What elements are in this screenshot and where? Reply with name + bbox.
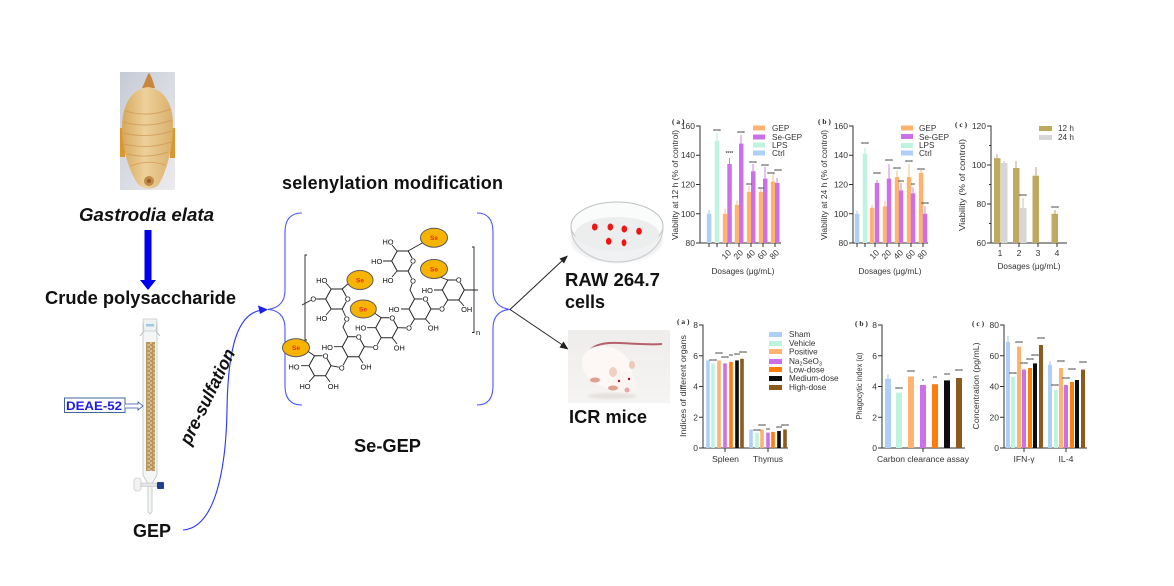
- bar chart: viability at 24 h: 140: [834, 150, 848, 160]
- significance marks: ****: [1015, 341, 1023, 347]
- bars: [707, 141, 780, 243]
- bar chart: viability by dosage: ( c ): [955, 120, 968, 129]
- legend: Medium-dose: [789, 374, 839, 383]
- left curly brace: [268, 213, 302, 405]
- legend: Se-GEP: [919, 133, 950, 142]
- bar chart: indices of organs: [677, 317, 839, 464]
- significance marks: **: [933, 376, 937, 382]
- significance marks: ****: [885, 159, 893, 165]
- bar chart: indices of organs: Indices of different organs: [679, 335, 688, 437]
- legend: [753, 124, 803, 158]
- substituent labels: [288, 238, 480, 391]
- bar chart: viability by dosage: ****: [1051, 206, 1059, 212]
- bar chart: phagocytic index: [855, 319, 969, 464]
- bar chart: phagocytic index: Carbon clearance assay: [877, 455, 969, 464]
- significance marks: [895, 369, 963, 393]
- bar chart: viability at 24 h: ( b ): [818, 117, 831, 126]
- significance marks: **: [911, 183, 915, 189]
- significance marks: ****: [715, 352, 723, 358]
- bar chart: viability at 24 h: 120: [834, 180, 848, 190]
- substituent labels: HO: [316, 276, 327, 285]
- significance marks: ****: [739, 351, 747, 357]
- substituent labels: HO: [316, 314, 327, 323]
- significance marks: ****: [1026, 358, 1034, 364]
- bars: [706, 359, 787, 448]
- bar chart: phagocytic index: 8: [872, 320, 877, 330]
- heading: RAW 264.7 cells: cells: [565, 292, 605, 312]
- substituent labels: O: [310, 295, 316, 304]
- icon: chromatography column: [134, 319, 164, 514]
- significance marks: ***: [944, 373, 950, 379]
- significance marks: ****: [1037, 337, 1045, 343]
- substituent labels: O: [323, 351, 329, 360]
- arrow: to ICR mice: [510, 310, 568, 350]
- bar chart: viability at 12 h: Dosages (μg/mL): [712, 267, 775, 276]
- significance marks: ****: [749, 161, 757, 167]
- legend: Ctrl: [772, 149, 785, 158]
- heading: Crude polysaccharide: Crude polysaccharide: [45, 288, 236, 308]
- selenium groups: Se: [356, 278, 364, 284]
- significance marks: ***: [734, 353, 740, 359]
- bar chart: viability at 12 h: 100: [681, 209, 695, 219]
- significance marks: ****: [905, 160, 913, 166]
- significance marks: ****: [873, 172, 881, 178]
- x tick labels: 4: [1055, 248, 1060, 258]
- ring oxygens: [310, 258, 462, 371]
- icon: petri dish: [571, 202, 663, 263]
- callout: DEAE-52: DEAE-52: [66, 399, 122, 413]
- significance marks: ****: [1020, 362, 1028, 368]
- significance marks: ***: [746, 183, 752, 189]
- significance marks: ****: [758, 424, 766, 430]
- bar chart: viability at 24 h: [818, 117, 950, 276]
- bar chart: cytokine concentration: IL-4: [1058, 455, 1074, 464]
- substituent labels: OH: [394, 344, 405, 352]
- bar chart: indices of organs: Thymus: [753, 455, 783, 464]
- x tick labels: 40: [743, 247, 757, 261]
- bar chart: viability at 12 h: [671, 117, 803, 276]
- bar chart: viability by dosage: Dosages (μg/mL): [998, 262, 1061, 271]
- bar chart: cytokine concentration: 80: [990, 320, 999, 330]
- callout: DEAE-52: [64, 398, 143, 413]
- chemical structure: Se-GEP: [282, 228, 480, 391]
- bar chart: viability at 12 h: Viability at 12 h (% of control): [671, 130, 680, 240]
- significance marks: **: [729, 354, 733, 360]
- significance marks: ****: [895, 387, 903, 393]
- legend: Se-GEP: [772, 133, 803, 142]
- significance marks: ****: [907, 370, 915, 376]
- x tick labels: 80: [915, 247, 929, 261]
- label: pre-sulfation: pre-sulfation: [175, 346, 239, 449]
- legend: Ctrl: [919, 149, 932, 158]
- heading: selenylation modification: selenylation modification: [282, 173, 503, 193]
- heading: RAW 264.7 cells: [565, 270, 660, 312]
- bar chart: indices of organs: 6: [693, 351, 698, 361]
- significance marks: ****: [893, 167, 901, 173]
- bar chart: viability at 24 h: Dosages (μg/mL): [858, 267, 922, 276]
- bars: [1006, 342, 1085, 448]
- substituent labels: HO: [382, 238, 394, 246]
- substituent labels: HO: [382, 276, 394, 285]
- heading: GEP: GEP: [133, 521, 171, 541]
- bar chart: viability at 24 h: 80: [839, 238, 848, 248]
- bars: [885, 376, 962, 448]
- bar chart: viability by dosage: 80: [977, 199, 986, 209]
- bar chart: indices of organs: ( a ): [677, 317, 690, 326]
- significance marks: ****: [767, 172, 775, 178]
- bar chart: phagocytic index: 2: [872, 412, 877, 422]
- x tick labels: 60: [755, 247, 769, 261]
- significance marks: ****: [1079, 361, 1087, 367]
- selenium groups: Se: [359, 306, 367, 314]
- heading: ICR mice: ICR mice: [569, 407, 647, 427]
- bar chart: viability at 12 h: ( a ): [672, 117, 685, 126]
- legend: LPS: [919, 141, 935, 150]
- significance marks: ****: [955, 369, 963, 375]
- significance marks: ****: [861, 142, 869, 148]
- significance marks: *: [922, 379, 924, 385]
- significance marks: ****: [1009, 372, 1017, 378]
- legend: High-dose: [789, 383, 827, 392]
- substituent labels: OH: [360, 362, 372, 372]
- bar chart: phagocytic index: 4: [872, 382, 877, 392]
- bar chart: cytokine concentration: 20: [990, 412, 999, 422]
- legend: [769, 330, 839, 392]
- arrow: to RAW cells: [510, 256, 568, 310]
- x tick labels: 20: [731, 247, 745, 261]
- bar chart: cytokine concentration: 60: [990, 351, 999, 361]
- significance marks: ***: [758, 187, 764, 193]
- substituent labels: HO: [355, 324, 366, 332]
- bar chart: viability at 12 h: 160: [681, 121, 695, 131]
- substituent labels: O: [345, 295, 351, 304]
- bar chart: viability at 12 h: 120: [681, 180, 695, 190]
- legend: [1039, 124, 1074, 142]
- substituent labels: HO: [288, 362, 300, 372]
- substituent labels: O: [356, 332, 362, 341]
- significance marks: ****: [1068, 368, 1076, 374]
- bar chart: cytokine concentration: [972, 319, 1087, 464]
- bar chart: phagocytic index: Phagocytic index (α): [855, 352, 864, 420]
- legend: GEP: [772, 124, 790, 133]
- heading: Se-GEP: Se-GEP: [354, 436, 421, 456]
- substituent labels: OH: [428, 324, 439, 332]
- bar chart: indices of organs: 8: [693, 320, 698, 330]
- x tick labels: 60: [903, 247, 917, 261]
- bar chart: viability at 12 h: 140: [681, 150, 695, 160]
- bar chart: indices of organs: 4: [693, 382, 698, 392]
- legend: 3: [819, 362, 822, 368]
- bar chart: indices of organs: 0: [693, 443, 698, 453]
- bar chart: indices of organs: 2: [693, 412, 698, 422]
- significance marks: ****: [781, 424, 789, 430]
- x tick labels: [867, 247, 929, 261]
- x tick labels: 10: [867, 247, 881, 261]
- bar chart: cytokine concentration: 0: [994, 443, 999, 453]
- legend: Vehicle: [789, 339, 816, 348]
- significance marks: ****: [761, 164, 769, 170]
- legend: GEP: [919, 124, 937, 133]
- significance marks: ****: [1057, 360, 1065, 366]
- substituent labels: O: [456, 276, 462, 285]
- bar chart: viability by dosage: [955, 120, 1074, 271]
- legend: Sham: [789, 330, 811, 339]
- bar chart: phagocytic index: 0: [872, 443, 877, 453]
- x tick labels: [998, 248, 1060, 258]
- selenium groups: Se: [292, 345, 300, 352]
- selenium groups: Se: [430, 235, 438, 242]
- substituent labels: O: [389, 313, 395, 322]
- selenium groups: [282, 228, 448, 357]
- x tick labels: 3: [1036, 248, 1041, 258]
- substituent labels: O: [344, 315, 350, 324]
- bar chart: cytokine concentration: IFN-γ: [1014, 455, 1034, 464]
- significance marks: ***: [776, 426, 782, 432]
- bar chart: indices of organs: Spleen: [712, 455, 739, 464]
- bar chart: viability at 12 h: 80: [686, 238, 695, 248]
- substituent labels: OH: [328, 382, 339, 391]
- bar chart: viability at 24 h: 160: [834, 121, 848, 131]
- x tick labels: 10: [719, 247, 733, 261]
- x tick labels: 2: [1017, 248, 1022, 258]
- significance marks: ****: [753, 429, 761, 435]
- bar chart: viability at 24 h: Viability at 24 h (% of control): [820, 130, 829, 240]
- significance marks: [861, 142, 929, 208]
- bar chart: viability by dosage: 120: [972, 121, 986, 131]
- glycosidic bonds: [301, 242, 478, 382]
- heading: Gastrodia elata: Gastrodia elata: [79, 205, 214, 225]
- bar chart: cytokine concentration: 40: [990, 382, 999, 392]
- legend: [901, 124, 950, 158]
- sugar rings: [309, 251, 464, 376]
- legend: Low-dose: [789, 366, 825, 374]
- heading: RAW 264.7 cells: RAW 264.7: [565, 270, 660, 290]
- substituent labels: O: [410, 257, 416, 266]
- bar chart: viability by dosage: 60: [977, 238, 986, 248]
- significance marks: ****: [721, 356, 729, 362]
- substituent labels: O: [406, 324, 412, 333]
- substituent labels: HO: [371, 257, 382, 266]
- legend: Na: [789, 357, 799, 366]
- substituent labels: O: [339, 363, 345, 372]
- significance marks: ****: [726, 151, 733, 157]
- significance marks: [709, 351, 789, 435]
- legend: Positive: [789, 348, 818, 356]
- substituent labels: O: [373, 343, 379, 352]
- significance marks: ****: [917, 168, 925, 174]
- bars: [994, 158, 1058, 243]
- bar chart: phagocytic index: ( b ): [855, 319, 868, 328]
- substituent labels: n: [476, 328, 480, 337]
- substituent labels: O: [423, 295, 429, 304]
- significance marks: ****: [1051, 384, 1059, 390]
- arrow: blue down arrow: [140, 230, 156, 290]
- substituent labels: HO: [299, 382, 311, 391]
- bar chart: cytokine concentration: ( c ): [972, 319, 985, 328]
- selenium groups: Se: [430, 266, 438, 274]
- significance marks: [713, 129, 782, 193]
- bar chart: phagocytic index: 6: [872, 351, 877, 361]
- bar chart: viability at 24 h: 100: [834, 209, 848, 219]
- substituent labels: HO: [322, 343, 333, 352]
- legend: SeO: [803, 357, 819, 366]
- x tick labels: 40: [891, 247, 905, 261]
- substituent labels: HO: [388, 305, 400, 314]
- significance marks: ****: [713, 129, 721, 135]
- photo: ICR mouse: [568, 330, 670, 403]
- significance marks: ****: [1062, 377, 1070, 383]
- x tick labels: [719, 247, 781, 261]
- legend: 2: [799, 362, 803, 368]
- bar chart: viability by dosage: ****: [1019, 194, 1027, 200]
- significance marks: ****: [921, 202, 929, 208]
- legend: LPS: [772, 141, 788, 150]
- x tick labels: 20: [879, 247, 893, 261]
- bar chart: viability by dosage: 100: [972, 160, 986, 170]
- substituent labels: OH: [461, 305, 472, 314]
- photo: Gastrodia elata tuber: [120, 72, 175, 190]
- significance marks: ***: [898, 180, 904, 186]
- right curly brace: [477, 213, 510, 405]
- significance marks: ****: [1031, 354, 1039, 360]
- legend: 12 h: [1058, 124, 1074, 133]
- bar chart: viability by dosage: Viability (% of control): [958, 139, 967, 231]
- x tick labels: 80: [767, 247, 781, 261]
- bar chart: cytokine concentration: Concentration (pg/mL): [972, 342, 981, 429]
- significance marks: ****: [709, 359, 717, 365]
- significance marks: [1009, 337, 1087, 390]
- substituent labels: O: [410, 277, 416, 286]
- arrow: GEP to selenylation curve: [183, 306, 268, 530]
- legend: 24 h: [1058, 133, 1074, 142]
- significance marks: **: [766, 428, 770, 434]
- significance marks: ****: [737, 131, 745, 137]
- bars: [855, 154, 927, 243]
- substituent labels: O: [439, 305, 445, 314]
- x tick labels: 1: [998, 248, 1003, 258]
- significance marks: ****: [774, 169, 782, 175]
- substituent labels: HO: [422, 286, 433, 295]
